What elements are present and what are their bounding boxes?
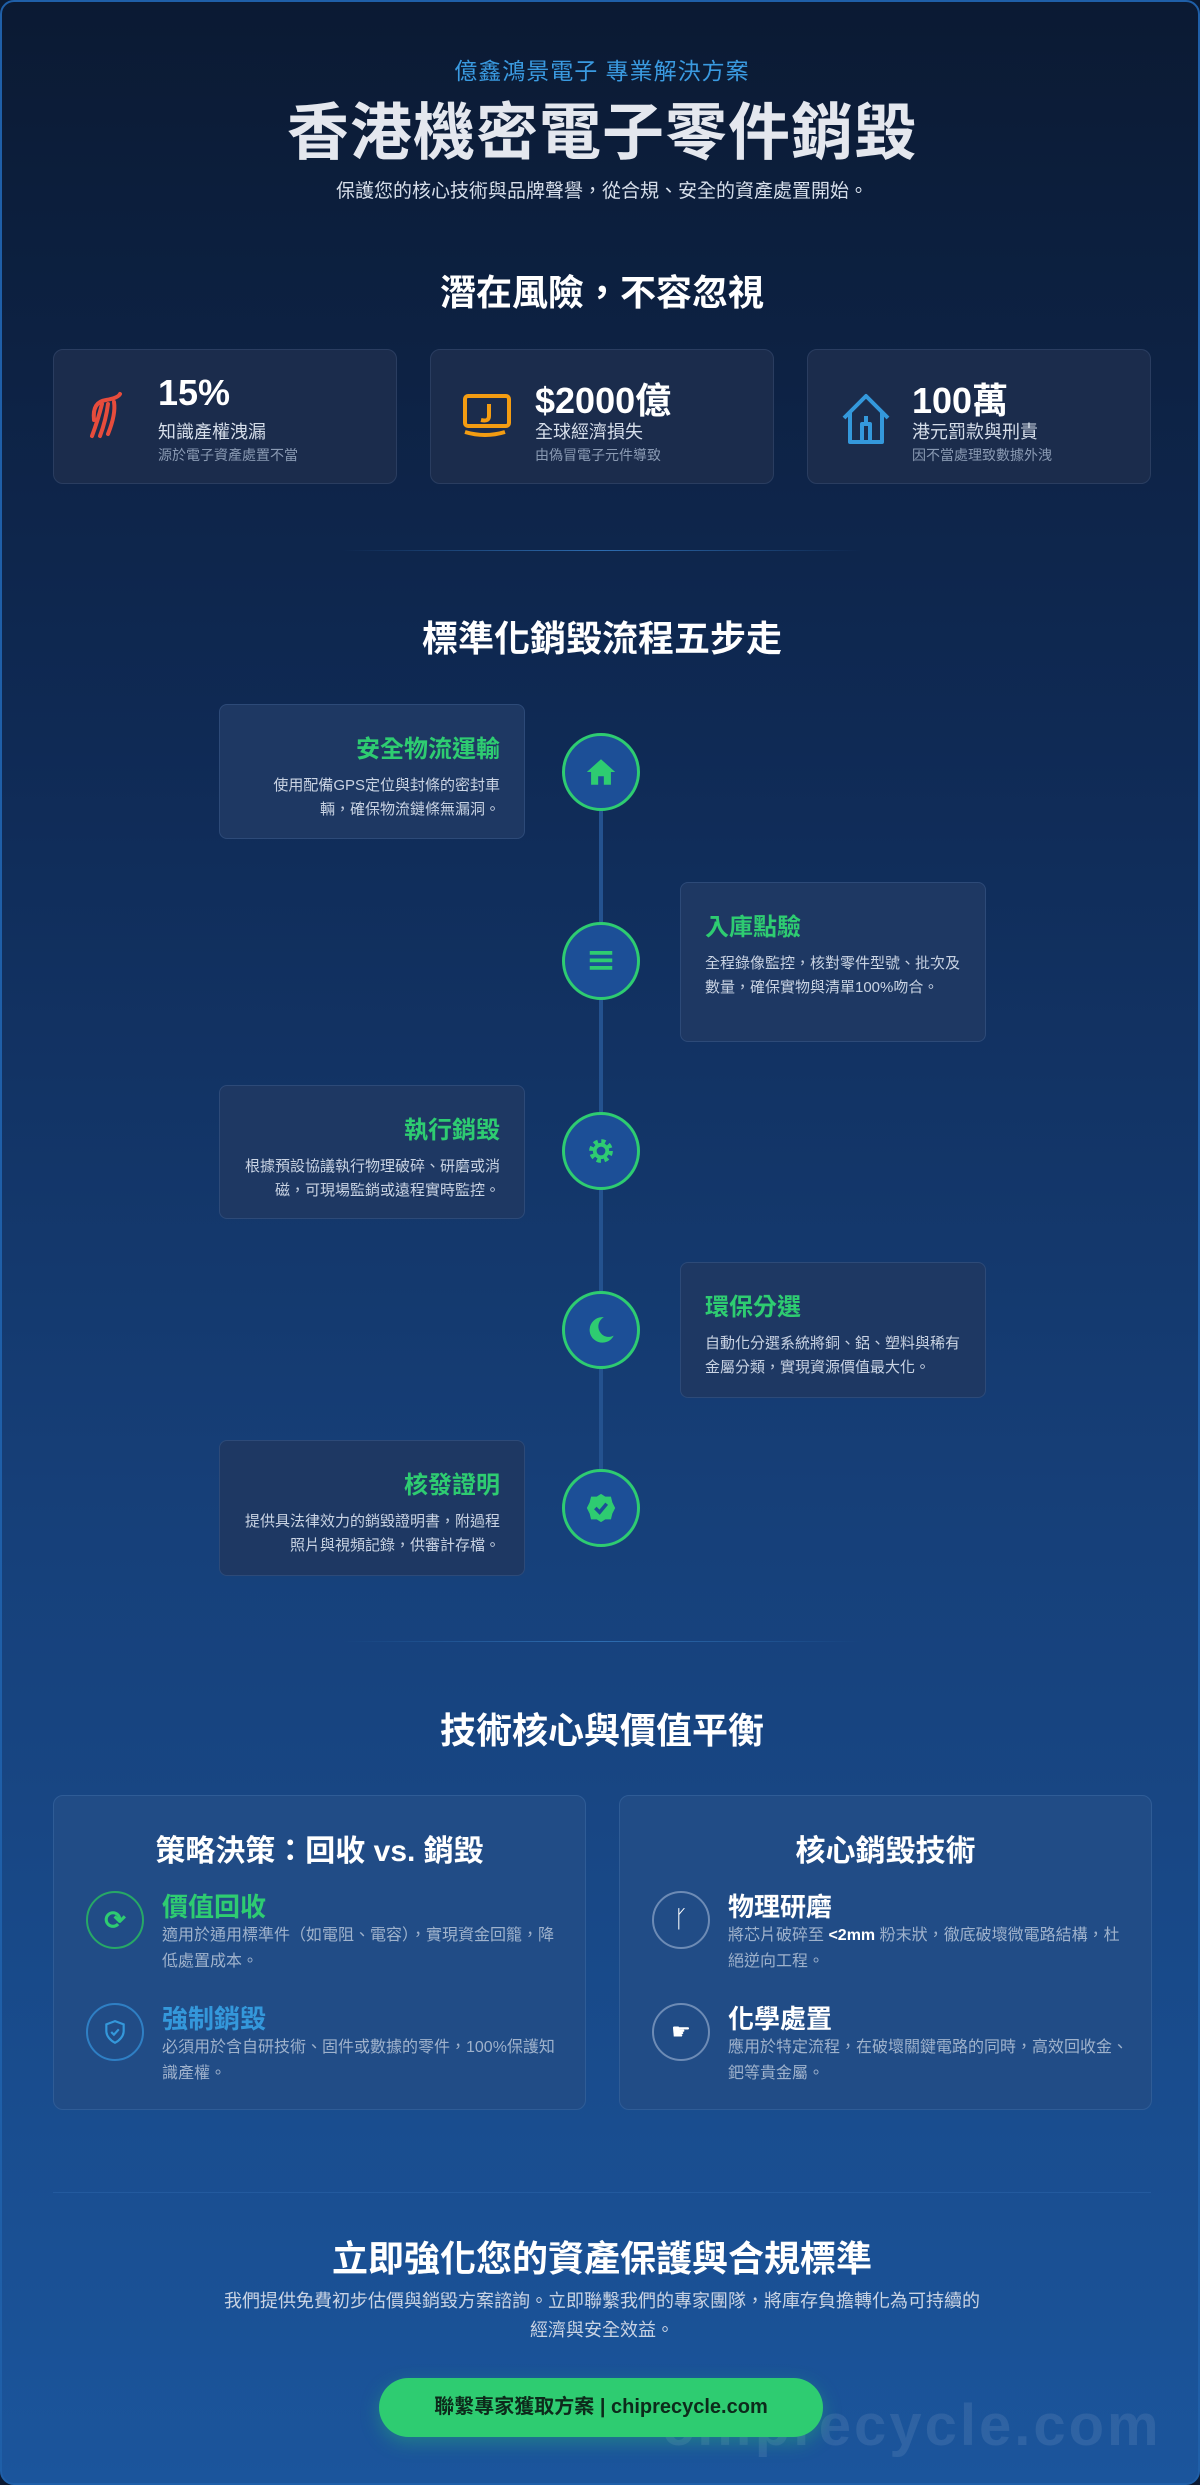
icon: house — [842, 394, 890, 444]
step 3 card: 根據預設協議執行物理破碎、研磨或消磁，可現場監銷或遠程實時監控。 — [245, 1158, 500, 1199]
step 3 node — [562, 1112, 640, 1190]
stat card: IP leak: 知識產權洩漏 — [158, 422, 266, 442]
panel: strategy: 價值回收 — [162, 1892, 266, 1922]
step 1 node — [562, 733, 640, 811]
panel: core tech: 物理研磨 — [728, 1892, 832, 1922]
step 5 card: 核發證明 — [404, 1472, 500, 1499]
heading: risks: 潛在風險，不容忽視 — [440, 272, 764, 313]
watermark: chiprecycle.com — [662, 2393, 1162, 2458]
step 3 card — [219, 1085, 525, 1219]
step 4 card: 環保分選 — [705, 1294, 801, 1321]
step 1 card — [219, 704, 525, 839]
item: forced destruction — [86, 2003, 555, 2082]
CTA paragraph: 我們提供免費初步估價與銷毀方案諮詢。立即聯繫我們的專家團隊，將庫存負擔轉化為可持續的經濟與安全效益。 — [224, 2291, 980, 2340]
panel: strategy: 策略決策：回收 vs. 銷毀 — [155, 1835, 484, 1868]
stat card: fines: 港元罰款與刑責 — [912, 422, 1038, 442]
step 2 card: 全程錄像監控，核對零件型號、批次及數量，確保實物與清單100%吻合。 — [705, 955, 960, 996]
stat card: economic loss: 由偽冒電子元件導致 — [535, 447, 661, 463]
tagline: 保護您的核心技術與品牌聲譽，從合規、安全的資產處置開始。 — [336, 181, 868, 202]
step 4 card — [680, 1262, 986, 1398]
stat card: IP leak: 15% — [158, 372, 230, 413]
step 5 node — [562, 1469, 640, 1547]
stat card: IP leak — [53, 349, 397, 484]
panel: core tech: 核心銷毀技術 — [796, 1835, 976, 1868]
panel: strategy: 強制銷毀 — [162, 2004, 266, 2034]
heading: process: 標準化銷毀流程五步走 — [422, 618, 782, 659]
stat card: economic loss — [430, 349, 774, 484]
panel: core tech: ☛ — [671, 2019, 691, 2044]
panel: strategy: 必須用於含自研技術、固件或數據的零件，100%保護知識產權。 — [162, 2039, 555, 2082]
panel: core tech: 應用於特定流程，在破壞關鍵電路的同時，高效回收金、鈀等貴金屬。 — [728, 2039, 1128, 2082]
step 1 card: 使用配備GPS定位與封條的密封車輛，確保物流鏈條無漏洞。 — [273, 777, 500, 818]
panel: core tech: 將芯片破碎至 <2mm 粉末狀，徹底破壞微電路結構，杜絕逆向工程。 — [728, 1927, 1120, 1970]
timeline line — [599, 772, 603, 1508]
step 1 card: 安全物流運輸 — [356, 736, 500, 763]
heading: tech core: 技術核心與價值平衡 — [440, 1710, 764, 1751]
stat card: economic loss: 全球經濟損失 — [535, 422, 643, 442]
step 2 node — [562, 922, 640, 1000]
icon: money — [463, 394, 511, 437]
panel: strategy: 適用於通用標準件（如電阻、電容），實現資金回籠，降低處置成本。 — [162, 1927, 554, 1970]
stat card: IP leak: 源於電子資產處置不當 — [158, 447, 298, 463]
step 3 card: 執行銷毀 — [404, 1117, 500, 1144]
CTA heading: 立即強化您的資產保護與合規標準 — [332, 2238, 872, 2279]
step 4 card: 自動化分選系統將銅、鋁、塑料與稀有金屬分類，實現資源價值最大化。 — [705, 1335, 960, 1376]
stat card: economic loss: $2000億 — [535, 380, 671, 421]
item: grinding — [652, 1891, 1120, 1970]
icon: leak — [90, 392, 122, 438]
item: value recovery — [86, 1891, 554, 1970]
panel: strategy: ⟳ — [104, 1904, 126, 1934]
step 5 card — [219, 1440, 525, 1576]
header subtitle: 億鑫鴻景電子 專業解決方案 — [454, 58, 750, 84]
panel: core tech — [619, 1795, 1152, 2110]
main title: 香港機密電子零件銷毀 — [287, 99, 917, 168]
stat card: fines — [807, 349, 1151, 484]
stat card: fines: 因不當處理致數據外洩 — [912, 447, 1052, 463]
panel: core tech: ᚴ — [674, 1906, 688, 1933]
panel: strategy — [53, 1795, 586, 2110]
step 5 card: 提供具法律效力的銷毀證明書，附過程照片與視頻記錄，供審計存檔。 — [245, 1513, 500, 1554]
CTA button — [379, 2378, 823, 2437]
step 2 card — [680, 882, 986, 1042]
CTA button: 聯繫專家獲取方案 | chiprecycle.com — [434, 2396, 768, 2418]
step 2 card: 入庫點驗 — [705, 914, 801, 941]
stat card: fines: 100萬 — [912, 380, 1008, 421]
panel: core tech: 化學處置 — [728, 2004, 832, 2034]
item: chemical — [652, 2003, 1128, 2082]
step 4 node — [562, 1291, 640, 1369]
